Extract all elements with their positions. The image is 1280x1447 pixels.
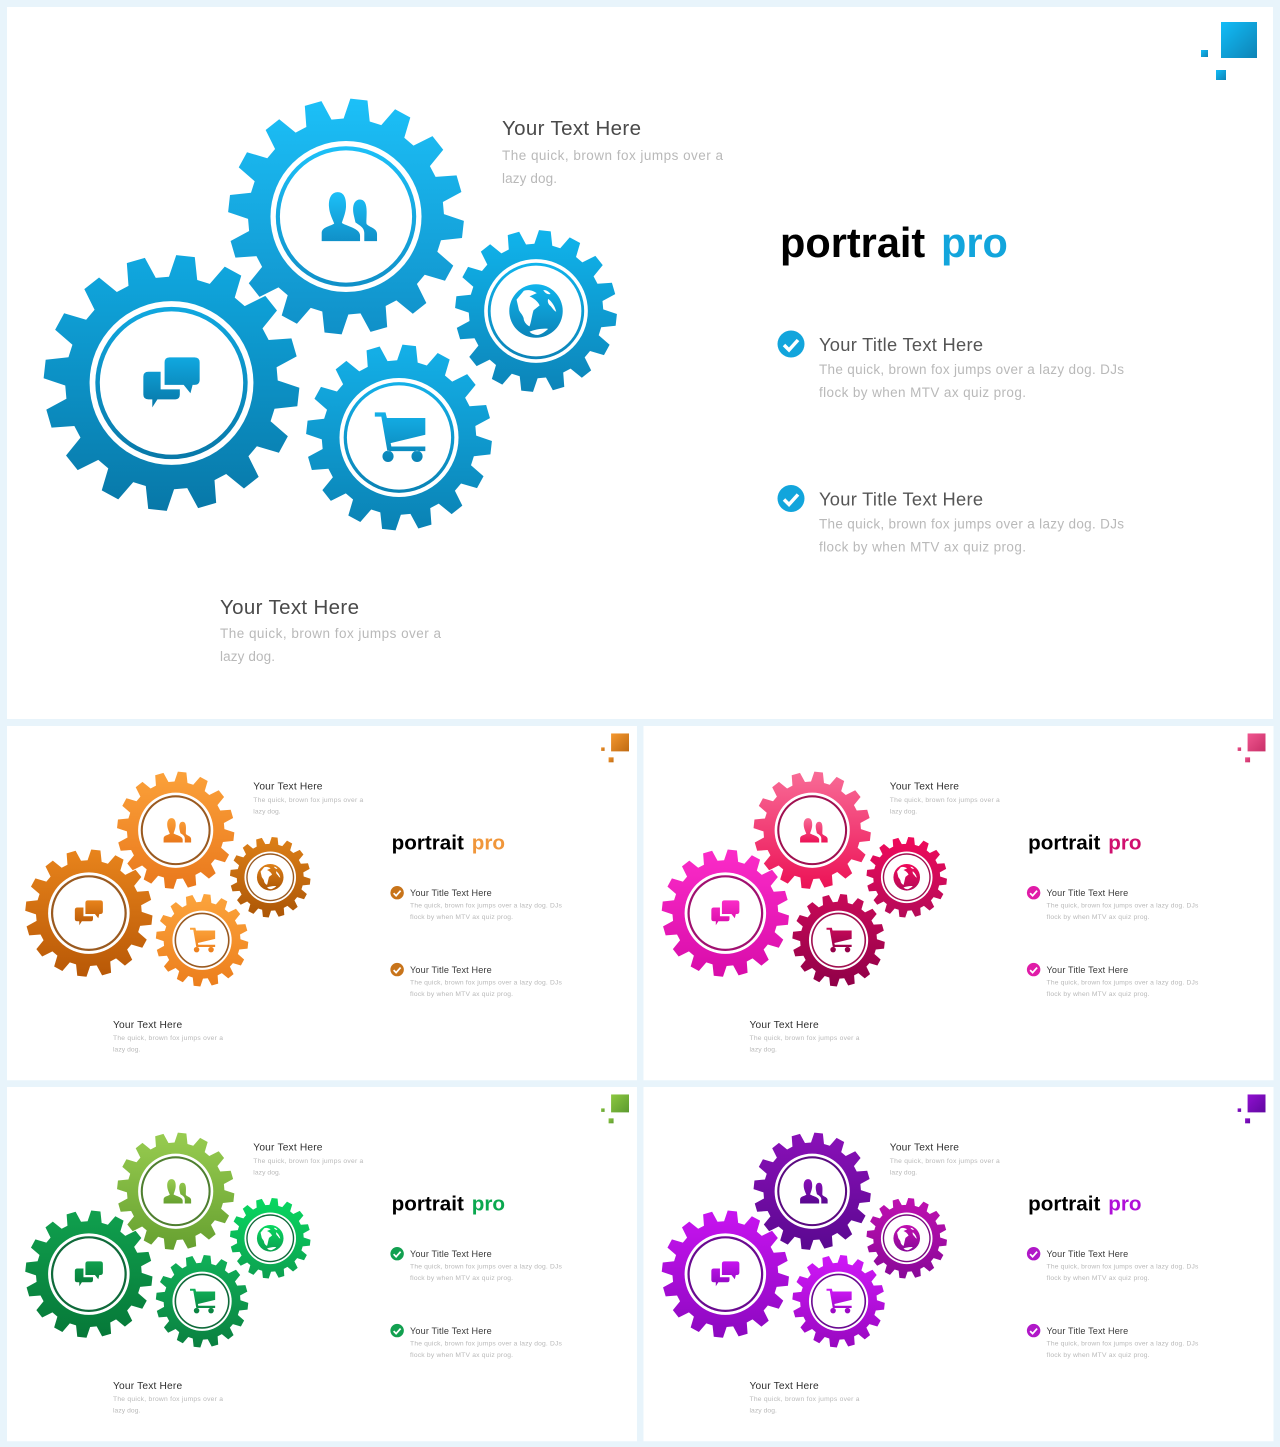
text block: top gear caption: lazy dog.: [502, 171, 557, 186]
panel: pink slide: [644, 726, 1273, 1080]
text block: bottom gear caption: Your Text Here: [749, 1020, 819, 1031]
text block: item 1: [1047, 888, 1199, 921]
text block: item 1: The quick, brown fox jumps over a lazy dog. DJs: [1047, 1264, 1199, 1271]
text block: item 1: Your Title Text Here: [1047, 888, 1128, 898]
text block: top gear caption: [253, 1143, 364, 1177]
icon: check: [390, 1247, 404, 1260]
text block: item 1: The quick, brown fox jumps over a lazy dog. DJs: [410, 1264, 562, 1271]
gear: people: [228, 99, 464, 334]
corner squares: [601, 1094, 629, 1123]
text block: bottom gear caption: lazy dog.: [113, 1407, 140, 1414]
icon: check: [778, 485, 804, 512]
icon: check: [1027, 1247, 1040, 1260]
text block: top gear caption: [890, 1143, 1000, 1177]
text block: bottom gear caption: [749, 1381, 860, 1414]
icon: check: [390, 1324, 404, 1337]
text block: top gear caption: lazy dog.: [253, 809, 281, 816]
title: pro: [472, 1192, 505, 1215]
corner squares: [1238, 1094, 1266, 1123]
text block: top gear caption: The quick, brown fox jumps over a: [253, 797, 364, 804]
text block: item 2: [410, 1326, 562, 1359]
text block: item 1: [1047, 1249, 1199, 1282]
text block: item 1: flock by when MTV ax quiz prog.: [410, 1275, 513, 1282]
title: portrait: [780, 219, 925, 266]
text block: item 2: [1047, 965, 1199, 998]
text block: item 2: The quick, brown fox jumps over a lazy dog. DJs: [819, 516, 1124, 532]
gear: people: [754, 1133, 871, 1250]
text block: item 2: flock by when MTV ax quiz prog.: [1047, 991, 1150, 998]
gear: cart: [156, 1255, 248, 1347]
text block: bottom gear caption: lazy dog.: [113, 1046, 140, 1053]
text block: item 2: Your Title Text Here: [1047, 1326, 1128, 1336]
text block: top gear caption: Your Text Here: [502, 117, 641, 140]
gear: globe: [455, 230, 617, 392]
text block: item 1: [410, 888, 562, 921]
text block: bottom gear caption: The quick, brown fox jumps over a: [749, 1035, 860, 1042]
text block: item 2: flock by when MTV ax quiz prog.: [1047, 1352, 1150, 1359]
text block: item 2: [1047, 1326, 1199, 1359]
title: portrait: [1028, 1192, 1100, 1215]
gear: globe: [866, 1198, 947, 1279]
text block: bottom gear caption: The quick, brown fox jumps over a: [113, 1396, 223, 1403]
text block: top gear caption: Your Text Here: [890, 782, 959, 793]
corner squares: [1238, 733, 1266, 762]
text block: top gear caption: [890, 782, 1000, 816]
gear: cart: [792, 894, 885, 986]
text block: bottom gear caption: The quick, brown fox jumps over a: [749, 1396, 860, 1403]
icon: check: [390, 963, 404, 976]
text block: item 2: Your Title Text Here: [819, 488, 983, 510]
text block: item 1: Your Title Text Here: [1047, 1249, 1128, 1259]
gear: people: [754, 772, 871, 889]
icon: check: [390, 886, 404, 899]
text block: top gear caption: Your Text Here: [253, 1143, 323, 1154]
text block: item 2: The quick, brown fox jumps over a lazy dog. DJs: [1047, 1341, 1199, 1348]
gear: globe: [230, 837, 310, 918]
title: pro: [472, 831, 505, 854]
text block: item 1: flock by when MTV ax quiz prog.: [819, 385, 1026, 400]
text block: item 2: Your Title Text Here: [1047, 965, 1128, 975]
title: pro: [1108, 831, 1142, 854]
gear: cart: [306, 345, 492, 530]
gear: globe: [230, 1198, 310, 1279]
text block: item 2: The quick, brown fox jumps over a lazy dog. DJs: [1047, 980, 1199, 987]
text block: bottom gear caption: [113, 1381, 223, 1414]
corner squares: [1201, 22, 1257, 80]
icon: check: [1027, 963, 1040, 976]
text block: top gear caption: lazy dog.: [890, 1170, 917, 1177]
text block: top gear caption: lazy dog.: [890, 809, 917, 816]
text block: item 1: Your Title Text Here: [410, 1249, 492, 1259]
text block: item 2: Your Title Text Here: [410, 965, 492, 975]
text block: item 2: flock by when MTV ax quiz prog.: [819, 540, 1026, 554]
text block: top gear caption: [253, 782, 364, 816]
text block: item 1: The quick, brown fox jumps over a lazy dog. DJs: [819, 362, 1124, 377]
text block: item 1: flock by when MTV ax quiz prog.: [1047, 914, 1150, 921]
text block: top gear caption: The quick, brown fox jumps over a: [502, 148, 723, 163]
text block: item 1: [410, 1249, 562, 1282]
text block: bottom gear caption: lazy dog.: [749, 1407, 777, 1414]
gear: chat: [44, 255, 299, 511]
title: portrait: [392, 831, 464, 854]
icon: check: [778, 330, 804, 358]
text block: bottom gear caption: [749, 1020, 860, 1053]
icon: check: [1027, 1324, 1040, 1337]
corner squares: [601, 733, 629, 762]
text block: item 2: flock by when MTV ax quiz prog.: [410, 1352, 513, 1359]
text block: item 1: flock by when MTV ax quiz prog.: [1047, 1275, 1150, 1282]
text block: bottom gear caption: Your Text Here: [113, 1020, 182, 1031]
text block: top gear caption: lazy dog.: [253, 1170, 281, 1177]
text block: top gear caption: The quick, brown fox jumps over a: [890, 797, 1000, 804]
text block: item 2: [819, 488, 1124, 554]
panel: orange slide: [7, 726, 637, 1080]
text block: item 2: Your Title Text Here: [410, 1326, 492, 1336]
text block: item 2: The quick, brown fox jumps over a lazy dog. DJs: [410, 980, 562, 987]
gear: globe: [866, 837, 947, 918]
panel: main blue slide: [7, 7, 1273, 719]
text block: top gear caption: Your Text Here: [253, 782, 323, 793]
text block: item 1: The quick, brown fox jumps over a lazy dog. DJs: [410, 903, 562, 910]
text block: bottom gear caption: Your Text Here: [113, 1381, 182, 1392]
text block: item 2: flock by when MTV ax quiz prog.: [410, 991, 513, 998]
text block: bottom gear caption: lazy dog.: [220, 649, 275, 664]
icon: check: [1027, 886, 1040, 899]
text block: item 1: Your Title Text Here: [819, 334, 983, 355]
text block: item 1: The quick, brown fox jumps over a lazy dog. DJs: [1047, 903, 1199, 910]
text block: bottom gear caption: [113, 1020, 223, 1053]
text block: item 1: Your Title Text Here: [410, 888, 492, 898]
gear: chat: [662, 1210, 789, 1338]
text block: item 2: [410, 965, 562, 998]
text block: item 2: The quick, brown fox jumps over a lazy dog. DJs: [410, 1341, 562, 1348]
title: pro: [1108, 1192, 1142, 1215]
panel: green slide: [7, 1087, 637, 1441]
gear: chat: [662, 849, 789, 977]
gear: chat: [25, 1210, 152, 1338]
text block: top gear caption: [502, 117, 723, 186]
text block: bottom gear caption: The quick, brown fox jumps over a: [113, 1035, 223, 1042]
text block: bottom gear caption: Your Text Here: [749, 1381, 819, 1392]
gear: chat: [25, 849, 152, 977]
text block: item 1: [819, 334, 1124, 400]
title: pro: [941, 219, 1008, 266]
text block: bottom gear caption: [220, 596, 441, 664]
text block: top gear caption: The quick, brown fox jumps over a: [253, 1158, 364, 1165]
text block: top gear caption: Your Text Here: [890, 1143, 959, 1154]
text block: top gear caption: The quick, brown fox jumps over a: [890, 1158, 1000, 1165]
gear: people: [117, 772, 234, 889]
panel: purple slide: [644, 1087, 1273, 1441]
gear: people: [117, 1133, 234, 1250]
title: portrait: [1028, 831, 1100, 854]
title: portrait: [392, 1192, 464, 1215]
gear: cart: [792, 1255, 885, 1347]
text block: bottom gear caption: lazy dog.: [749, 1046, 777, 1053]
text block: bottom gear caption: Your Text Here: [220, 596, 359, 619]
text block: item 1: flock by when MTV ax quiz prog.: [410, 914, 513, 921]
text block: bottom gear caption: The quick, brown fox jumps over a: [220, 626, 441, 641]
gear: cart: [156, 894, 248, 986]
